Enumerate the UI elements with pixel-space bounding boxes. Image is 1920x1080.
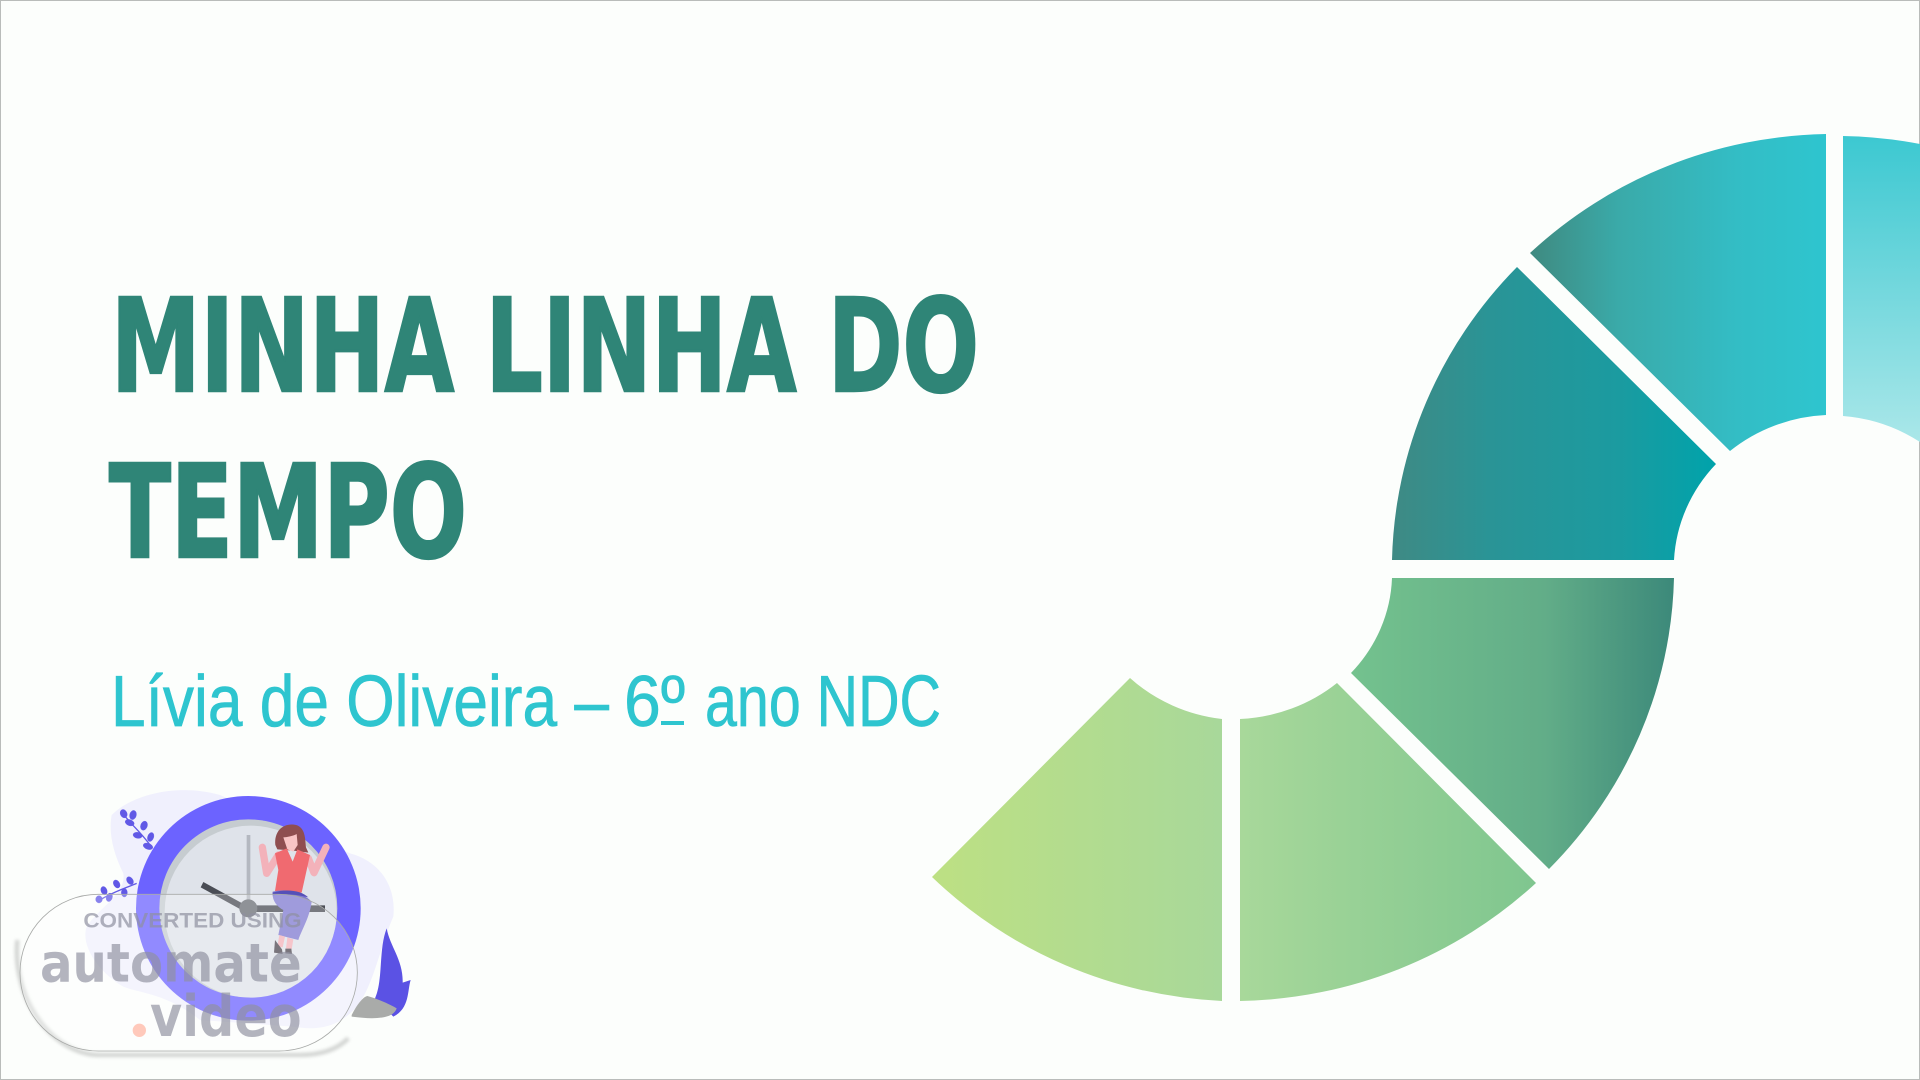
icon: flame [375,928,411,1017]
watermark pill [20,894,357,1051]
ankles [277,935,293,949]
watermark word: .video: video [150,984,302,1050]
icon: rock [352,996,397,1018]
hour hand [201,882,248,912]
segment: lime green [932,678,1222,1001]
icon: plant sprig lower [96,875,137,903]
segment: teal, top [1530,134,1826,451]
chart: S-shaped segmented ring [932,134,1920,1001]
face [283,834,298,852]
watermark word: automate: automate [40,932,302,995]
minute hand [247,835,250,908]
clock [136,796,361,1021]
clock face [159,819,337,997]
watermark: converted using automate.video [17,894,357,1055]
heading: title: TEMPO [109,438,467,588]
icon: plant sprig upper [119,808,155,851]
subtitle: author: 6º [624,662,685,742]
subtitle: author: Lívia de Oliveira – [111,662,610,742]
trousers [273,890,312,940]
shirt [275,848,310,893]
illustration: woman sitting on clock with watermark [14,790,411,1058]
subtitle: author [111,662,941,742]
hair [275,825,308,853]
figure: woman sitting on clock hand [262,825,326,954]
blob: pale lavender background [85,790,394,1028]
segment: mid green [1351,578,1674,869]
watermark caption: CONVERTED USING [83,909,302,933]
clock ring [136,796,361,1021]
heading: title: MINHA LINHA DO [111,272,979,422]
segment: soft green [1240,683,1536,1001]
watermark shadow [17,940,348,1055]
heading: title [109,272,979,588]
subtitle: author: ano NDC [705,662,941,742]
segment: dark teal [1392,267,1716,560]
shoes [274,940,292,954]
arms [262,847,278,873]
segment: light teal, far right [1843,136,1920,442]
clock hub [239,899,257,917]
